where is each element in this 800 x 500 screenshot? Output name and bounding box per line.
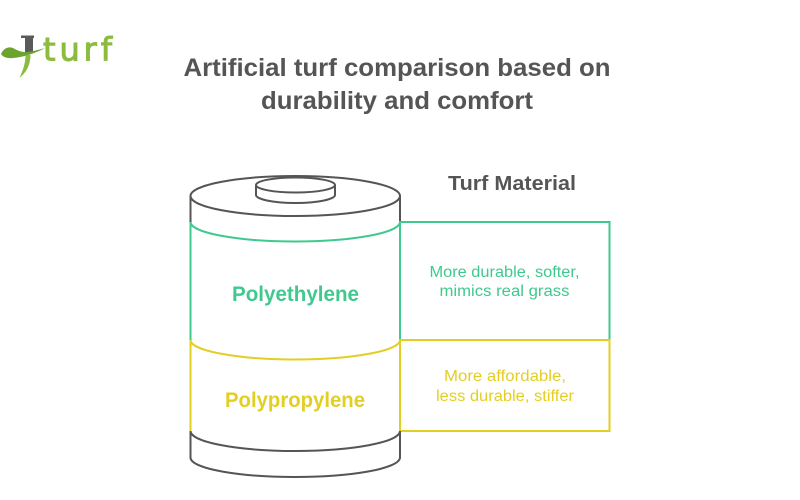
panel: Polyethylene description: More durable, softer, xyxy=(430,264,580,281)
heading: Turf Material: Turf Material xyxy=(448,173,576,195)
panel: Polyethylene description xyxy=(400,222,610,340)
title xyxy=(184,54,610,115)
panel: Polypropylene description: More affordable, xyxy=(444,368,566,385)
label: Polypropylene: Polypropylene xyxy=(225,389,365,412)
title: durability and comfort xyxy=(261,87,534,115)
panel: Polypropylene cylinder segment xyxy=(190,340,400,431)
logo: Jturf xyxy=(1,30,113,78)
cylinder base xyxy=(190,431,400,477)
panel: Polyethylene cylinder segment xyxy=(190,222,400,341)
title: Artificial turf comparison based on xyxy=(184,54,610,82)
logo: Jturf: turf xyxy=(43,30,113,68)
panel: Polypropylene description xyxy=(400,340,610,431)
panel: Polyethylene description: mimics real grass xyxy=(440,283,570,300)
panel: Polypropylene description: less durable, stiffer xyxy=(436,388,574,405)
label: Polyethylene: Polyethylene xyxy=(232,283,359,306)
cylinder top cap xyxy=(190,176,400,222)
